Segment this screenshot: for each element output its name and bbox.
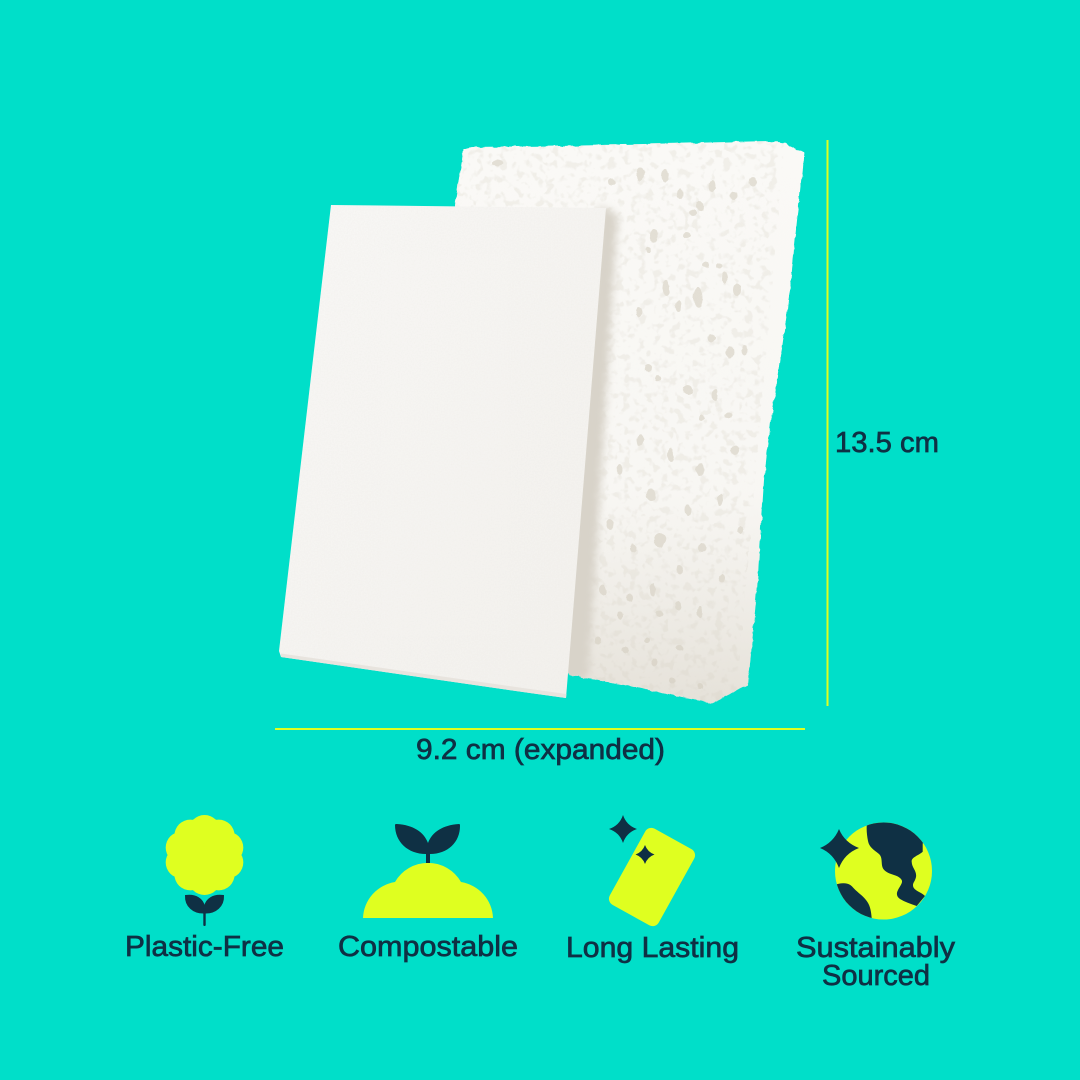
height label: 13.5 cm (835, 427, 939, 459)
benefit: sustainably sourced (796, 815, 956, 992)
label: Compostable: Compostable (338, 931, 518, 963)
back textured sponge (450, 138, 810, 708)
infographic canvas (127, 140, 956, 986)
label: Sustainably Sourced: Sustainably (796, 932, 956, 964)
height dimension line (826, 140, 828, 706)
width dimension line (275, 728, 805, 730)
label: Sustainably Sourced: Sourced (822, 960, 930, 992)
icon: globe with sparkle (820, 822, 932, 920)
front flat compressed pad (275, 200, 610, 702)
benefit: long lasting (566, 815, 739, 964)
label: Plastic-Free: Plastic-Free (125, 931, 284, 963)
benefit: plastic-free (125, 815, 284, 963)
width label: 9.2 cm (expanded) (416, 734, 665, 766)
icon: sponge with sparkles (606, 815, 698, 929)
sponge product illustration (275, 138, 810, 708)
label: Sustainably Sourced (796, 932, 956, 992)
icon: sprout on mound (363, 824, 493, 918)
benefit: compostable (338, 824, 518, 963)
icon: flower (166, 815, 243, 926)
label: Long Lasting: Long Lasting (566, 932, 739, 964)
